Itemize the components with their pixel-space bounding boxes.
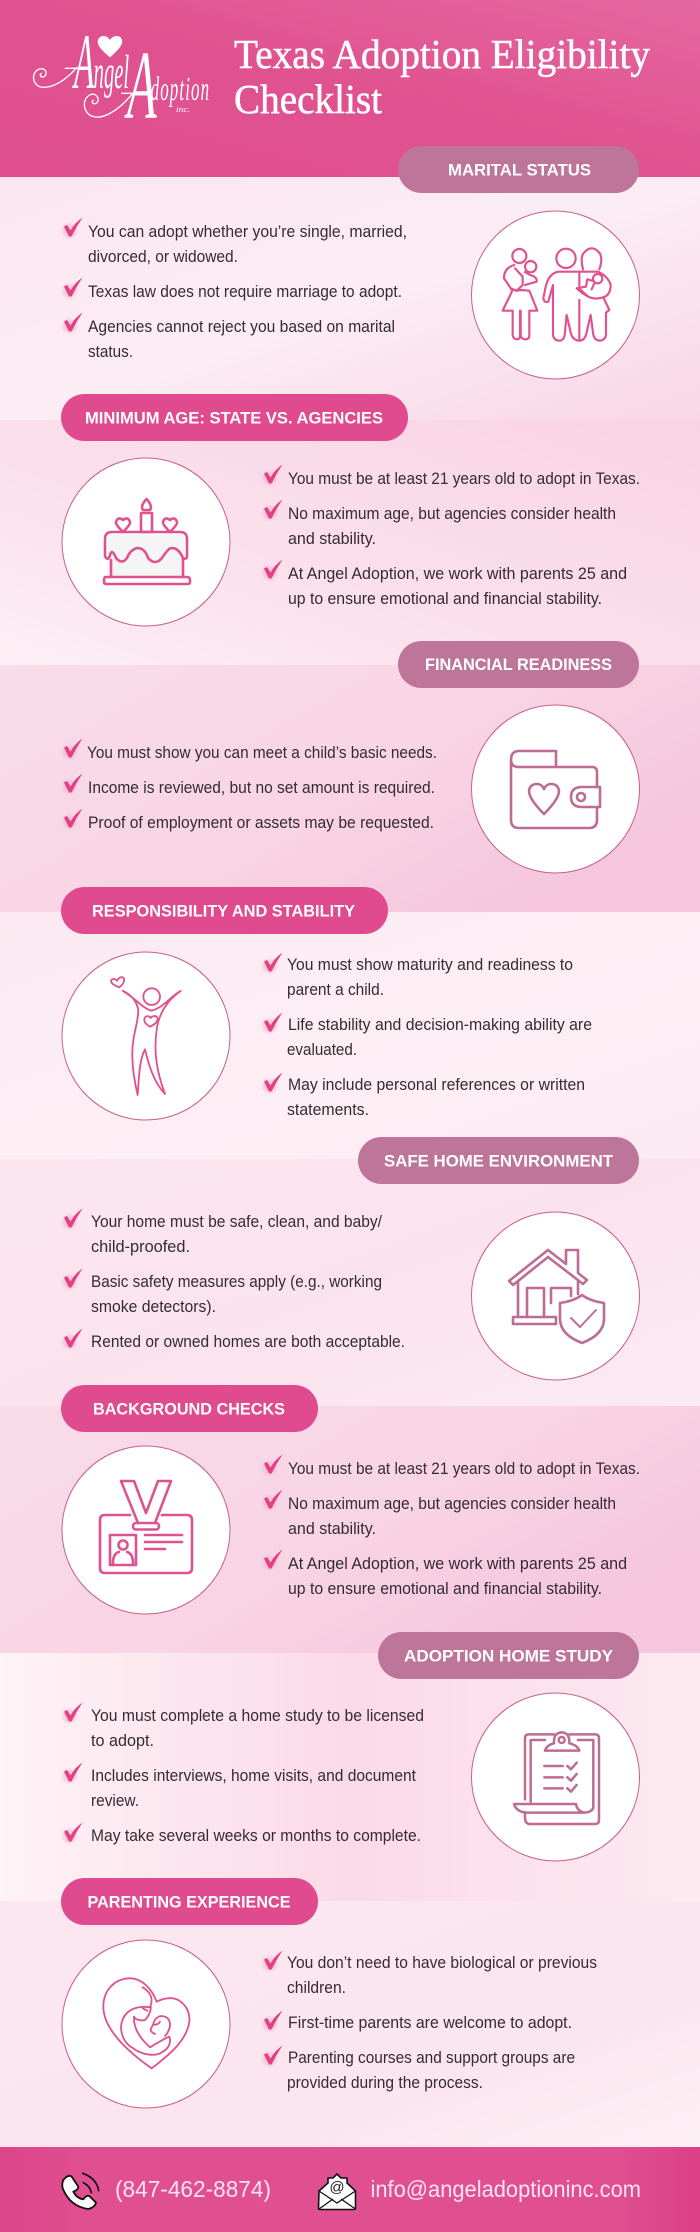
icon: ID badge circle bbox=[62, 1446, 230, 1614]
checklist: responsibility: evaluated. bbox=[287, 1040, 357, 1059]
section: marital status bbox=[62, 146, 640, 379]
checklist: safe home: smoke detectors). bbox=[91, 1297, 216, 1316]
logo swirls bbox=[33, 68, 145, 117]
checklist: parenting experience: First-time parents are welcome to adopt. bbox=[288, 2013, 572, 2032]
band: responsibility background bbox=[0, 912, 700, 1159]
checklist: background checks bbox=[262, 1454, 640, 1598]
footer contact bbox=[62, 2173, 641, 2210]
checklist: parenting experience: provided during the process. bbox=[287, 2073, 483, 2092]
heading pill: background checks bbox=[61, 1385, 318, 1432]
section: safe home environment bbox=[62, 1137, 640, 1380]
checklist: background checks: up to ensure emotional and financial stability. bbox=[288, 1579, 602, 1598]
icon: person with hearts circle bbox=[62, 952, 230, 1120]
heading pill: responsibility: RESPONSIBILITY AND STABILITY bbox=[92, 902, 356, 920]
logo word Adoption: doption bbox=[151, 70, 210, 108]
checklist: financial readiness: You must show you can meet a child’s basic needs. bbox=[87, 743, 437, 762]
heading pill: background checks: BACKGROUND CHECKS bbox=[93, 1400, 285, 1418]
header band bbox=[0, 0, 700, 177]
checklist: minimum age: up to ensure emotional and financial stability. bbox=[288, 589, 602, 608]
section: adoption home study bbox=[62, 1632, 640, 1861]
checklist: safe home: child-proofed. bbox=[91, 1237, 190, 1256]
checklist: parenting experience: You don’t need to have biological or previous bbox=[287, 1953, 597, 1972]
checklist: marital status: Texas law does not require marriage to adopt. bbox=[88, 282, 402, 301]
checklist: marital status: Agencies cannot reject you based on marital bbox=[88, 317, 395, 336]
checklist: responsibility: statements. bbox=[287, 1100, 369, 1119]
checklist: financial readiness bbox=[62, 738, 437, 832]
checklist: financial readiness: Income is reviewed, but no set amount is required. bbox=[88, 778, 435, 797]
checklist: safe home: Basic safety measures apply (e.g., working bbox=[91, 1272, 382, 1291]
title: Checklist bbox=[234, 76, 383, 122]
checklist: minimum age: At Angel Adoption, we work with parents 25 and bbox=[288, 564, 627, 583]
checklist: safe home: Your home must be safe, clean, and baby/ bbox=[91, 1212, 382, 1231]
icon: clipboard circle bbox=[472, 1693, 640, 1861]
checklist: minimum age: No maximum age, but agencies consider health bbox=[288, 504, 616, 523]
checklist: minimum age: You must be at least 21 years old to adopt in Texas. bbox=[288, 469, 640, 488]
checklist: parenting experience: Parenting courses and support groups are bbox=[288, 2048, 575, 2067]
heading pill: safe home: SAFE HOME ENVIRONMENT bbox=[384, 1152, 614, 1170]
checklist: marital status bbox=[62, 218, 407, 361]
checklist: home study: review. bbox=[91, 1791, 139, 1810]
checklist: home study: Includes interviews, home visits, and document bbox=[91, 1766, 416, 1785]
logo word Adoption: A bbox=[124, 32, 157, 140]
heading pill: safe home bbox=[358, 1137, 639, 1184]
phone number: (847-462-8874) bbox=[115, 2176, 271, 2202]
band: financial readiness background bbox=[0, 665, 700, 912]
heading pill: marital status: MARITAL STATUS bbox=[448, 160, 591, 180]
icon: envelope bbox=[318, 2174, 356, 2210]
footer band bbox=[0, 2147, 700, 2232]
checklist: responsibility: parent a child. bbox=[287, 980, 384, 999]
section: minimum age bbox=[61, 394, 640, 626]
checklist: home study: to adopt. bbox=[91, 1731, 154, 1750]
heading pill: financial readiness bbox=[398, 641, 639, 688]
checklist: financial readiness: Proof of employment or assets may be requested. bbox=[88, 813, 434, 832]
icon: wallet circle bbox=[472, 705, 640, 873]
section: responsibility and stability bbox=[61, 887, 592, 1120]
logo inc: inc. bbox=[176, 105, 190, 114]
icon: birthday cake circle bbox=[62, 458, 230, 626]
band: background checks background bbox=[0, 1406, 700, 1653]
checklist: background checks: No maximum age, but agencies consider health bbox=[288, 1494, 616, 1513]
checklist: marital status: You can adopt whether you’re single, married, bbox=[88, 222, 407, 241]
checklist: home study: May take several weeks or months to complete. bbox=[91, 1826, 421, 1845]
icon: house with shield circle bbox=[472, 1212, 640, 1380]
checklist: safe home: Rented or owned homes are both acceptable. bbox=[91, 1332, 405, 1351]
heading pill: home study bbox=[378, 1632, 639, 1679]
band: home study background bbox=[0, 1653, 700, 1901]
icon: phone bbox=[62, 2173, 99, 2209]
checklist: home study bbox=[62, 1702, 424, 1845]
checklist: responsibility: Life stability and decision-making ability are bbox=[288, 1015, 592, 1034]
checklist: responsibility bbox=[262, 952, 592, 1119]
band: parenting experience background bbox=[0, 1901, 700, 2147]
icon: mother and baby heart circle bbox=[62, 1940, 230, 2108]
heading pill: parenting experience bbox=[61, 1878, 318, 1925]
checklist: marital status: status. bbox=[88, 342, 133, 361]
logo: Angel Adoption Inc. bbox=[33, 19, 210, 140]
checklist: responsibility: You must show maturity and readiness to bbox=[287, 955, 573, 974]
section: parenting experience bbox=[61, 1878, 597, 2108]
heading pill: marital status bbox=[398, 146, 639, 193]
logo word Angel: Angel bbox=[72, 19, 129, 105]
heading pill: home study: ADOPTION HOME STUDY bbox=[404, 1646, 614, 1666]
checklist: responsibility: May include personal references or written bbox=[288, 1075, 585, 1094]
title: Texas Adoption Eligibility bbox=[234, 31, 650, 77]
checklist: background checks: and stability. bbox=[288, 1519, 376, 1538]
checklist: minimum age: and stability. bbox=[288, 529, 376, 548]
heading pill: financial readiness: FINANCIAL READINESS bbox=[425, 655, 612, 674]
title bbox=[234, 31, 650, 122]
band: minimum age background bbox=[0, 420, 700, 665]
logo heart bbox=[98, 36, 122, 57]
checklist: parenting experience: children. bbox=[287, 1978, 346, 1997]
icon: envelope: @ bbox=[329, 2179, 345, 2196]
band: marital status background bbox=[0, 177, 700, 420]
checklist: marital status: divorced, or widowed. bbox=[88, 247, 238, 266]
checklist: home study: You must complete a home study to be licensed bbox=[91, 1706, 424, 1725]
checklist: background checks: You must be at least 21 years old to adopt in Texas. bbox=[288, 1459, 640, 1478]
email address: info@angeladoptioninc.com bbox=[370, 2176, 641, 2202]
section: background checks bbox=[61, 1385, 640, 1614]
heading pill: responsibility bbox=[61, 887, 388, 934]
icon: family circle bbox=[472, 211, 640, 379]
heading pill: minimum age bbox=[61, 394, 408, 441]
section: financial readiness bbox=[62, 641, 640, 873]
checklist: minimum age bbox=[262, 464, 640, 608]
checklist: safe home bbox=[62, 1208, 405, 1351]
band: safe home background bbox=[0, 1159, 700, 1406]
checklist: background checks: At Angel Adoption, we work with parents 25 and bbox=[288, 1554, 627, 1573]
heading pill: parenting experience: PARENTING EXPERIENCE bbox=[88, 1892, 290, 1912]
checklist: parenting experience bbox=[262, 1950, 597, 2092]
heading pill: minimum age: MINIMUM AGE: STATE VS. AGENCIES bbox=[85, 408, 383, 428]
